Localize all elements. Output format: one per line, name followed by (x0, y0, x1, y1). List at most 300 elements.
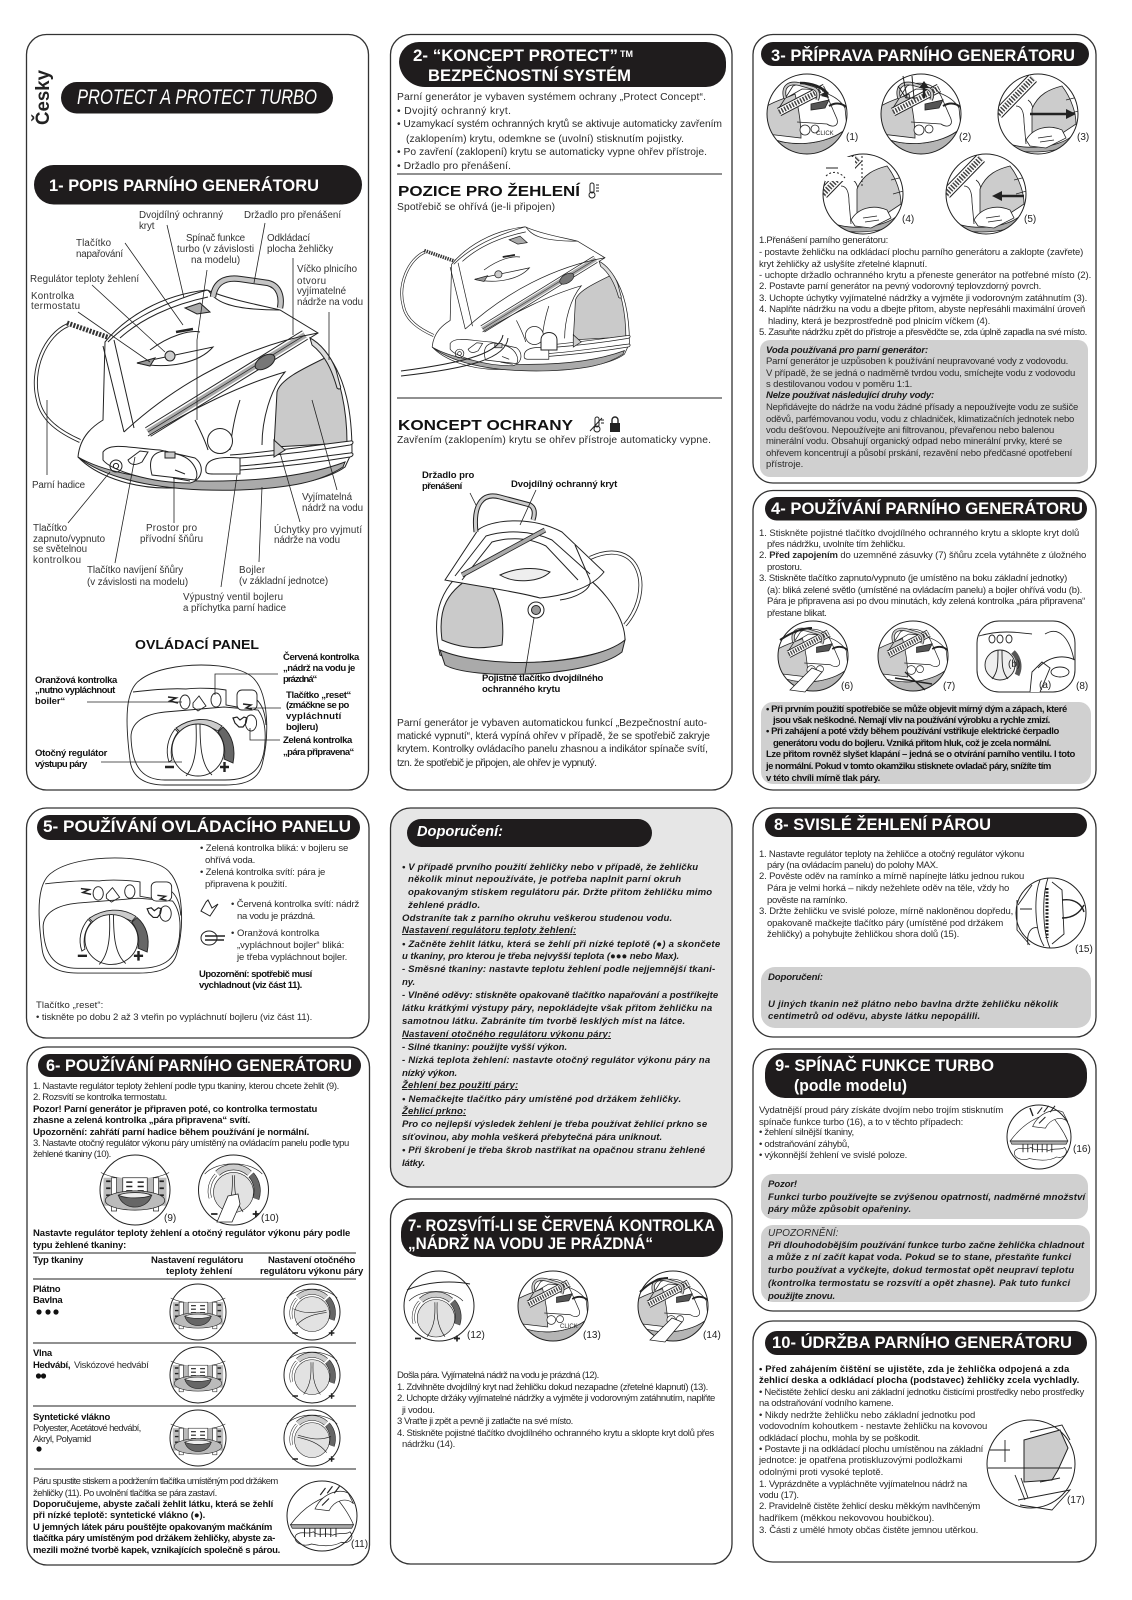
steps text: 3. Držte žehličku ve svislé poloze, mírně nakloněnou dopředu, (759, 906, 1013, 917)
part labels: Odkládací (267, 233, 310, 244)
warning (199, 969, 313, 991)
recommendations text: opakovaným stiskem regulátoru pár. Držte přitom žehličku mimo (408, 887, 712, 898)
note: first use: Lze přitom rovněž slyšet klapání – jedná se o otvírání parního ventilu. I toto (766, 749, 1075, 760)
maintenance text: • Nečistěte žehlicí desku ani základní jednotku čisticími prostředky nebo prostředky (759, 1387, 1085, 1398)
row: synthetics: Polyester, Acetátové hedvábí, (33, 1423, 141, 1434)
control panel labels: prázdná“ (283, 674, 318, 685)
recommendations text: Žehlicí prkno: (401, 1105, 466, 1117)
heading 7 (401, 1212, 723, 1257)
panel 6: používání parního generátoru (27, 1047, 370, 1565)
part labels: Regulátor teploty žehlení (30, 274, 139, 285)
steam text: mezili možné tvorbě kapek, vznikajících společně s párou. (33, 1545, 280, 1556)
steps text: 3 Vraťte ji zpět a pevně ji zatlačte na své místo. (397, 1416, 573, 1427)
part labels: Prostor pro (146, 523, 198, 534)
heading: ironing position: POZICE PRO ŽEHLENÍ (398, 182, 581, 200)
panel 1: popis parního generátoru (26, 34, 368, 790)
heading 9 (765, 1053, 1087, 1098)
steps text: prostoru. (767, 562, 802, 573)
note: water: Nelze používat následující druhy vody: (766, 390, 934, 401)
steps text: (a): bliká zelené světlo (umístěné na ovládacím panelu) a bojler ohřívá vodu (b). (767, 585, 1082, 596)
icon: red indicator (201, 900, 218, 916)
intro text: • žehlení silnější tkaniny, (759, 1127, 854, 1138)
part labels: a příchytka parní hadice (183, 603, 287, 614)
maintenance text: • Nikdy nedržte žehličku nebo základní jednotku pod (759, 1410, 975, 1421)
part labels: turbo (v závislosti (177, 244, 254, 255)
panel: doporučení (390, 808, 732, 1187)
control panel labels (35, 651, 360, 770)
fabric settings table: teploty žehlení (166, 1266, 233, 1277)
fabric settings table: Nastavení regulátoru (151, 1255, 243, 1266)
indicator text: • Zelená kontrolka svítí: pára je (200, 867, 325, 878)
heading 7: „NÁDRŽ NA VODU JE PRÁZDNÁ“ (408, 1234, 653, 1253)
steam text: U jemných látek páru pouštějte opakovaným mačkáním (33, 1522, 272, 1533)
instructions (33, 1081, 349, 1160)
recommendations text: několik minut nepoužíváte, je potřeba naplnit parní okruh (408, 874, 681, 885)
reset text: Tlačítko „reset“: (36, 1000, 103, 1011)
panel 5: ovládací panel (26, 808, 369, 1038)
maintenance text: vodu (17). (759, 1490, 799, 1501)
panel 4: používání (753, 490, 1096, 790)
fabric settings table: Nastavení otočného (268, 1255, 355, 1266)
steps text: opakovaně mačkejte tlačítko páry (umístěné pod držákem (767, 918, 1003, 929)
illustration 17: (17) (1067, 1495, 1085, 1506)
panel 10: údržba (753, 1321, 1096, 1562)
steps text: pověste na ramínko. (767, 895, 847, 906)
maintenance text: hadříkem (měkkou nekovovou houbičkou). (759, 1513, 934, 1524)
instructions: Upozornění: zahřátí parní hadice během používání je normální. (33, 1127, 309, 1138)
step illustration 3: (3) (1077, 132, 1089, 143)
icon: crossed thermometer (590, 417, 604, 432)
icon: orange indicator (201, 931, 225, 945)
heading 5 (37, 815, 360, 840)
table intro: Nastavte regulátor teploty žehlení a otočný regulátor výkonu páry podle (33, 1228, 350, 1239)
note: warning: a může z ní začít kapat voda. Pokud se to stane, přestaňte funkci (768, 1252, 1071, 1263)
part labels: Parní hadice (32, 480, 86, 491)
steps text: žehličky) a pohybujte žehličkou shora dolů (15). (767, 929, 959, 940)
maintenance text: • Před zahájením čištění se ujistěte, zda je žehlička odpojená a zda (759, 1364, 1070, 1375)
steam text: žehličky (11). Po uvolnění tlačítka se pára zastaví. (33, 1488, 217, 1499)
step illustration 4: (4) (902, 214, 914, 225)
part labels (30, 210, 363, 614)
part labels: Spínač funkce (186, 233, 246, 244)
reset text (36, 1000, 312, 1023)
steps text: kryt žehličky až uslyšíte zřetelné klapnutí. (759, 259, 927, 270)
step illustration 5: (5) (1024, 214, 1036, 225)
steps text: páry (na ovládacím panelu) do polohy MAX. (767, 860, 938, 871)
steps text: 2. Postavte parní generátor na pevný vodorovný teplovzdorný povrch. (759, 281, 1041, 292)
steps text: ji vodou. (401, 1405, 435, 1416)
steam text: tlačítka páry umístěným pod držákem žehličky, abyste za- (33, 1533, 275, 1544)
part labels: Výpustný ventil bojleru (183, 592, 283, 603)
recommendations text: - Silné tkaniny: použijte vyšší výkon. (402, 1042, 567, 1053)
note: caution: Pozor! (768, 1179, 798, 1190)
control panel labels: (zmáčkne se po (286, 700, 349, 711)
illustration 13 (518, 1271, 601, 1341)
part labels: Kontrolka (31, 291, 75, 302)
part labels: Dvojdílný ochranný (139, 210, 223, 221)
recommendations text: ny. (402, 977, 415, 988)
note: water: s destilovanou vodou v poměru 1:1. (766, 379, 912, 390)
instructions: zhasne a zelená kontrolka „pára připravena“ svítí. (33, 1115, 250, 1126)
part labels: Vyjímatelná (302, 492, 353, 503)
step illustration 2: (2) (959, 132, 971, 143)
maintenance text: 1. Vyprázdněte a vypláchněte vyjímatelnou nádrž na (759, 1479, 968, 1490)
illustration labels: ochranného krytu (482, 684, 560, 695)
table intro (33, 1228, 350, 1251)
control panel labels: Oranžová kontrolka (35, 675, 118, 686)
control panel labels: boiler“ (35, 696, 66, 707)
part labels: Tlačítko navíjení šňůry (87, 565, 183, 576)
part labels: zapnuto/vypnuto (33, 534, 106, 545)
step illustration 8: (b) (1008, 659, 1020, 670)
warning: Upozornění: spotřebič musí (199, 969, 313, 980)
heading 10: 10- ÚDRŽBA PARNÍHO GENERÁTORU (772, 1333, 1072, 1352)
recommendations text: - Nízká teplota žehlení: nastavte otočný regulátor výkonu páry na (402, 1055, 711, 1066)
row: wool: Hedvábí, (33, 1360, 70, 1371)
recommendations text: - Směsné tkaniny: nastavte teplotu žehlení podle nejjemnější tkani- (402, 964, 715, 975)
steam text: Doporučujeme, abyste začali žehlit látku, která se žehlí (33, 1499, 274, 1510)
step illustration 1: CLICK (816, 131, 834, 137)
part labels: Úchytky pro vyjmutí (274, 525, 362, 536)
step illustration 7: (7) (943, 681, 955, 692)
heading 8 (765, 813, 1087, 837)
illustration 13: CLICK (560, 1324, 578, 1330)
row: synthetics (33, 1410, 340, 1466)
recommendations text: - Vlněné oděvy: stiskněte opakovaně tlačítko napařování a postříkejte (402, 990, 719, 1001)
illustration labels: Dvojdílný ochranný kryt (511, 479, 618, 490)
heading 7: 7- ROZSVÍTÍ-LI SE ČERVENÁ KONTROLKA (408, 1216, 715, 1235)
note: first use (761, 702, 1091, 784)
steps text: Pára je připravena asi po dvou minutách, kdy zelená kontrolka „pára připravena“ (767, 596, 1085, 607)
maintenance text: odkládací plochu, mohla by se poškodit. (759, 1433, 920, 1444)
note: caution: Funkci turbo používejte se zvýšenou opatrností, nadměrné množství (768, 1192, 1086, 1203)
indicator text: • Oranžová kontrolka (231, 928, 320, 939)
note: caution: páry může způsobit opařeniny. (767, 1204, 911, 1215)
recommendations text: u tkaniny, pro kterou je třeba nejvyšší teplota (●●● nebo Max). (402, 951, 679, 962)
recommendations text: Pro co nejlepší výsledek žehlení je třeba používat žehlicí prkno se (402, 1119, 708, 1130)
steps text: přes nádržku, uvolníte tím žehličku. (767, 539, 905, 550)
fabric settings table: Typ tkaniny (33, 1255, 84, 1266)
control panel diagram (127, 665, 267, 785)
steps text (397, 1370, 715, 1450)
part labels: (v základní jednotce) (239, 576, 328, 587)
intro text: • odstraňování záhybů, (759, 1139, 849, 1150)
recommendations text: • Začněte žehlit látku, která se žehlí při nízké teplotě (●) a skončete (402, 939, 721, 950)
language tab: Česky (32, 70, 54, 125)
illustration 15: (15) (1075, 944, 1093, 955)
illustration 17 (987, 1420, 1085, 1510)
illustration: closed cover (436, 490, 640, 674)
heading 2: TM (620, 49, 633, 59)
recommendations text: látku krátkými výstupy páry, nepokládejte však přitom žehličku na (402, 1003, 713, 1014)
maintenance text: odolnými proti vysoké teplotě. (759, 1467, 883, 1478)
row: wool (33, 1347, 340, 1403)
panel 9: spínač turbo (753, 1049, 1096, 1311)
heading 10 (765, 1331, 1087, 1355)
recommendations text: žehlené prádlo. (407, 900, 480, 911)
part labels: Držadlo pro přenášení (244, 210, 341, 221)
instructions: 3. Nastavte otočný regulátor výkonu páry umístěný na ovládacím panelu podle typu (33, 1138, 349, 1149)
part labels: Tlačítko (33, 523, 68, 534)
illustration 13: (13) (583, 1330, 601, 1341)
control panel diagram (39, 858, 182, 973)
illustration 9: (9) (164, 1213, 176, 1224)
row: cotton: Plátno (33, 1284, 61, 1295)
paragraph: auto shutoff: tzn. že spotřebič je připojen, ale ohřev je vypnutý. (397, 758, 597, 769)
note: first use: je normální. Pokud v tomto okamžiku stisknete ovladač páry, snížíte tím (765, 761, 1051, 772)
heading 6: 6- POUŽÍVÁNÍ PARNÍHO GENERÁTORU (46, 1056, 352, 1075)
paragraph: auto shutoff: matické vypnutí“, která vypíná ohřev v případě, že se spotřebič zakryje (397, 731, 710, 742)
control panel callouts (87, 674, 281, 762)
instructions: 1. Nastavte regulátor teploty žehlení podle typu tkaniny, kterou chcete žehlit (9). (33, 1081, 339, 1092)
illustration labels: přenášení (422, 481, 463, 492)
illustration 12: (12) (467, 1330, 485, 1341)
control panel labels: Otočný regulátor (35, 748, 108, 759)
note: Doporučení: (768, 972, 823, 983)
recommendations text: samotnou látku. Zabráníte tím tvorbě lesklých míst na látce. (402, 1016, 685, 1027)
step illustration 8: (a) (1039, 680, 1051, 691)
note: first use: jsou však neškodné. Nemají vliv na používání výrobku a rychle zmizí. (772, 715, 1050, 726)
warning: vychladnout (viz část 11). (199, 980, 302, 991)
fabric settings table (33, 1253, 364, 1469)
steps text: 4. Naplňte nádržku na vodu a dbejte přitom, abyste nepřesáhli maximální úroveň (759, 304, 1085, 315)
steps text: 1.Přenášení parního generátoru: (759, 235, 888, 246)
steps text (759, 235, 1091, 338)
maintenance text: žehlicí deska a odkládací plocha (podstavec) žehličky zcela vychladly. (759, 1375, 1079, 1386)
indicator text (200, 843, 360, 963)
recommendations text: Nastavení otočného regulátoru výkonu páry: (402, 1029, 611, 1040)
intro text (759, 1105, 1003, 1161)
steps text: přestane blikat. (767, 608, 827, 619)
illustration 16: (16) (1073, 1144, 1091, 1155)
part labels: na modelu) (191, 255, 240, 266)
recommendations text: Nastavení regulátoru teploty žehlení: (402, 925, 576, 936)
heading 3: 3- PŘÍPRAVA PARNÍHO GENERÁTORU (771, 46, 1075, 65)
illustration 11 (287, 1481, 368, 1551)
heading 5: 5- POUŽÍVÁNÍ OVLÁDACÍHO PANELU (43, 817, 351, 836)
heading: protection concept: KONCEPT OCHRANY (398, 417, 573, 434)
caption: Spotřebič se ohřívá (je-li připojen) (397, 202, 555, 213)
steps text: Pára je velmi horká – nikdy nežehlete oděv na těle, vždy ho (767, 883, 1009, 894)
paragraph: auto shutoff (397, 718, 710, 769)
intro text: • Uzamykací systém ochranných krytů se aktivuje automaticky zavřením (397, 118, 722, 130)
note: warning: použijte znovu. (767, 1291, 835, 1302)
step illustration 4 (823, 154, 914, 234)
step illustration 5 (946, 154, 1036, 234)
row: cotton: Bavlna (33, 1295, 63, 1306)
step illustration 8 (977, 621, 1088, 692)
part labels: přívodní šňůru (140, 534, 203, 545)
step illustration 1: (1) (846, 132, 858, 143)
icon: thermometer (589, 183, 599, 198)
steps text: 2. Uchopte držáky vyjímatelné nádržky a vyjměte ji vodorovným zatáhnutím, naplňte (397, 1393, 715, 1404)
control panel labels: „nutno vypláchnout (35, 685, 116, 696)
title (61, 82, 333, 114)
indicator text: na vodu je prázdná. (237, 911, 315, 922)
heading: control panel: OVLÁDACÍ PANEL (135, 637, 259, 652)
steps text: 3. Uchopte úchytky vyjímatelné nádržky a vyjměte ji vodorovným zatáhnutím (3). (759, 293, 1087, 304)
indicator text: ohřívá voda. (205, 855, 255, 866)
steps text: - postavte žehličku na odkládací plochu parního generátoru a zaklopte (zavřete) (759, 247, 1083, 258)
title: PROTECT A PROTECT TURBO (77, 86, 317, 109)
heading: recommendations: Doporučení: (417, 823, 503, 840)
part labels: Víčko plnicího (297, 264, 358, 275)
note: water: Nepřidávejte do nádrže na vodu žádné přísady a nepoužívejte vodu ze sušiče (766, 402, 1078, 413)
heading 1: 1- POPIS PARNÍHO GENERÁTORU (49, 176, 319, 195)
step illustration 1 (767, 74, 858, 154)
note: water: ohřevem koncentrují a působí prskání, rezavění nebo předčasné opotřebení (766, 448, 1073, 459)
recommendations text: • Při škrobení je třeba škrob nastříkat na opačnou stranu žehlené (402, 1145, 706, 1156)
step illustration 6 (778, 621, 853, 692)
steps text: 1. Zdvihněte dvojdílný kryt nad žehličku dokud nezapadne (zřetelné klapnutí) (13). (397, 1382, 708, 1393)
maintenance text (758, 1364, 1085, 1536)
control panel labels: Tlačítko „reset“ (286, 690, 352, 701)
recommendations text: látky. (402, 1158, 425, 1169)
maintenance text: vodovodním kohoutkem - nestavte žehličku na kovovou (759, 1421, 987, 1432)
illustration labels: Držadlo pro (422, 470, 474, 481)
illustration 11: (11) (351, 1539, 368, 1550)
reset text: • tiskněte po dobu 2 až 3 vteřin po vypláchnutí bojleru (viz část 11). (36, 1012, 312, 1023)
heading 8: 8- SVISLÉ ŽEHLENÍ PÁROU (774, 815, 991, 834)
intro text: • Po zavření (zaklopení) krytu se automaticky vypne ohřev přístroje. (397, 147, 707, 158)
intro text: Parní generátor je vybaven systémem ochrany „Protect Concept“. (397, 92, 706, 103)
intro text: (zaklopením) krytu, odemkne se (uvolní) stisknutím pojistky. (406, 134, 684, 145)
panel 3: příprava (753, 34, 1096, 483)
heading 2: BEZPEČNOSTNÍ SYSTÉM (428, 66, 631, 85)
illustration 9 (100, 1155, 176, 1225)
note: first use: generátoru vodu do bojleru. Vzniká přitom hluk, což je zcela normální. (773, 738, 1051, 749)
illustration labels: Pojistné tlačítko dvojdílného (482, 673, 603, 684)
heading 1 (34, 165, 362, 204)
note (761, 967, 1091, 1028)
paragraph: auto shutoff: Parní generátor je vybaven automatickou funkcí „Bezpečnostní auto- (397, 718, 707, 729)
part labels: Tlačítko (76, 238, 112, 249)
part labels: vyjímatelné (297, 286, 347, 297)
intro text: • Držadlo pro přenášení. (397, 161, 511, 172)
intro text: spínače funkce turbo (16), a to v těchto případech: (759, 1117, 963, 1128)
steam text: Páru spustite stiskem a podržením tlačítka umístěným pod držákem (33, 1476, 278, 1487)
maintenance text: na odstraňování vodního kamene. (759, 1398, 893, 1409)
table intro: typu žehlené tkaniny: (33, 1240, 126, 1251)
steam text (33, 1476, 280, 1556)
note: first use: v této chvíli mírně tlak páry. (766, 773, 880, 784)
note: water: Parní generátor je uzpůsoben k používání neupravované vody z vodovodu. (766, 356, 1068, 367)
steps text (759, 849, 1024, 940)
steps text (759, 528, 1086, 619)
recommendations text: nízký výkon. (402, 1068, 457, 1079)
heading 9: 9- SPÍNAČ FUNKCE TURBO (775, 1056, 994, 1075)
illustration 10: (10) (261, 1213, 279, 1224)
maintenance text: 3. Části z umělé hmoty občas čistěte jemnou utěrkou. (759, 1525, 978, 1536)
steps text: 2. Před zapojením do uzemněné zásuvky (7) šňůru zcela vytáhněte z úložného (759, 550, 1086, 561)
steps text: 1. Nastavte regulátor teploty na žehličce a otočný regulátor výkonu (759, 849, 1024, 860)
note: warning: turbo používat a vyčkejte, dokud termostat opět neupraví teplotu (768, 1265, 1074, 1276)
part labels: (v závislosti na modelu) (87, 577, 188, 588)
illustration 10 (198, 1155, 279, 1225)
steps text: 2. Pověste oděv na ramínko a mírně napínejte látku jednou rukou (759, 871, 1024, 882)
steps text: hladiny, která je bezprostředně pod plnicím víčkem (4). (768, 316, 990, 327)
note: warning: UPOZORNĚNÍ: (768, 1226, 839, 1239)
control panel labels: Červená kontrolka (283, 651, 360, 663)
maintenance text: • Postavte ji na odkládací plochu umístěnou na základní (759, 1444, 984, 1455)
steps text: Došla pára. Vyjímatelná nádrž na vodu je prázdná (12). (397, 1370, 599, 1381)
note: warning (761, 1225, 1090, 1302)
instructions: žehlené tkaniny (10). (33, 1149, 111, 1160)
illustration 16 (1007, 1105, 1091, 1169)
intro text: • Dvojitý ochranný kryt. (397, 106, 511, 117)
row: synthetics: Akryl, Polyamid (33, 1434, 91, 1445)
part labels: nádrž na vodu (302, 503, 363, 514)
fabric settings table: regulátoru výkonu páry (260, 1266, 364, 1277)
note: U jiných tkanin než plátno nebo bavlna držte žehličku několik (768, 999, 1059, 1010)
illustration: steam generator (36, 279, 353, 490)
step illustration 3 (998, 74, 1089, 154)
note: warning: (kontrolka termostatu se rozsvítí a opět zhasne). Pak tuto funkci (768, 1278, 1070, 1289)
paragraph: auto shutoff: krytem. Kontrolky ovládacího panelu zhasnou a indikátor spínače svítí, (397, 744, 708, 755)
control panel labels: bojleru) (286, 722, 318, 733)
icon: lock (610, 417, 620, 432)
illustration 14: (14) (703, 1330, 721, 1341)
control panel labels: „pára připravena“ (283, 747, 355, 758)
recommendations text: Odstraníte tak z parního okruhu veškerou studenou vodu. (402, 913, 672, 924)
heading 2 (399, 42, 726, 87)
indicator text: je třeba vypláchnout bojler. (236, 952, 347, 963)
instructions: Pozor! Parní generátor je připraven poté, co kontrolka termostatu (33, 1104, 317, 1115)
panel 2: koncept protect (390, 34, 732, 790)
indicator text: připravena k použití. (205, 879, 287, 890)
note: water (760, 340, 1088, 477)
caption: Zavřením (zaklopením) krytu se ohřev přístroje automaticky vypne. (397, 435, 711, 446)
step illustration 7 (878, 621, 955, 692)
heading 2: 2- “KONCEPT PROTECT” (413, 47, 618, 65)
heading: recommendations (407, 819, 652, 847)
callout lines (47, 223, 337, 587)
recommendations text: Žehlení bez použití páry: (401, 1079, 518, 1091)
indicator text: • Zelená kontrolka bliká: v bojleru se (200, 843, 348, 854)
part labels: se světelnou (33, 544, 87, 555)
note: water: V případě, že se jedná o nadměrně tvrdou vodu, smíchejte vodu z vodovodu (766, 368, 1075, 379)
steps text: 4. Stiskněte pojistné tlačítko dvojdílného ochranného krytu a sklopte kryt dolů přes (397, 1428, 715, 1439)
part labels: kontrolkou (33, 555, 81, 566)
recommendations text (401, 862, 721, 1169)
recommendations text: • Nemačkejte tlačítko páry umístěné pod držákem žehličky. (402, 1094, 681, 1105)
steps text: - uchopte držadlo ochranného krytu a přeneste generátor na potřebné místo (2). (759, 270, 1091, 281)
note: caution (761, 1174, 1088, 1219)
recommendations text: • V případě prvního použití žehličky nebo v případě, že žehličku (402, 862, 698, 873)
steps text: 5. Zasuňte nádržku zpět do přístroje a přesvědčte se, zda úplně zapadla na své místo. (759, 327, 1087, 338)
indicator text: • Červená kontrolka svítí: nádrž (231, 899, 360, 910)
part labels: otvoru (297, 276, 326, 287)
indicator text: „vypláchnout bojler“ bliká: (237, 940, 344, 951)
row: wool: Vlna (33, 1348, 53, 1359)
note: water: oděvů, parfémovanou vodu, vodu z chladniček, klimatizačních jednotek nebo (766, 414, 1074, 425)
steps text: nádržku (14). (402, 1439, 455, 1450)
control panel labels: vypláchnutí (286, 711, 342, 722)
note: warning: Při dlouhodobějším používání funkce turbo začne žehlička chladnout (768, 1240, 1085, 1251)
row: cotton (33, 1284, 340, 1340)
maintenance text: 2. Pravidelně čistěte žehlicí desku měkkým navlhčeným (759, 1501, 980, 1512)
heading 4: 4- POUŽÍVÁNÍ PARNÍHO GENERÁTORU (771, 499, 1083, 518)
note: water: vodu dešťovou. Nepoužívejte ani filtrovanou, převařenou nebo balenou (766, 425, 1054, 436)
control panel labels: výstupu páry (35, 759, 88, 770)
intro text: • výkonnější žehlení ve svislé poloze. (759, 1150, 907, 1161)
recommendations text: síťovinou, aby mohla veškerá přebytečná pára uniknout. (402, 1132, 662, 1143)
note: first use: • Při zahájení a poté vždy během používání vstřikuje elektrické čerpadlo (766, 726, 1059, 737)
note: first use: • Při prvním použití spotřebiče se může objevit mírný dým a zápach, které (766, 704, 1067, 715)
part labels: nádrže na vodu (297, 297, 363, 308)
row: synthetics: Syntetické vlákno (33, 1412, 110, 1423)
part labels: plocha žehličky (267, 244, 333, 255)
